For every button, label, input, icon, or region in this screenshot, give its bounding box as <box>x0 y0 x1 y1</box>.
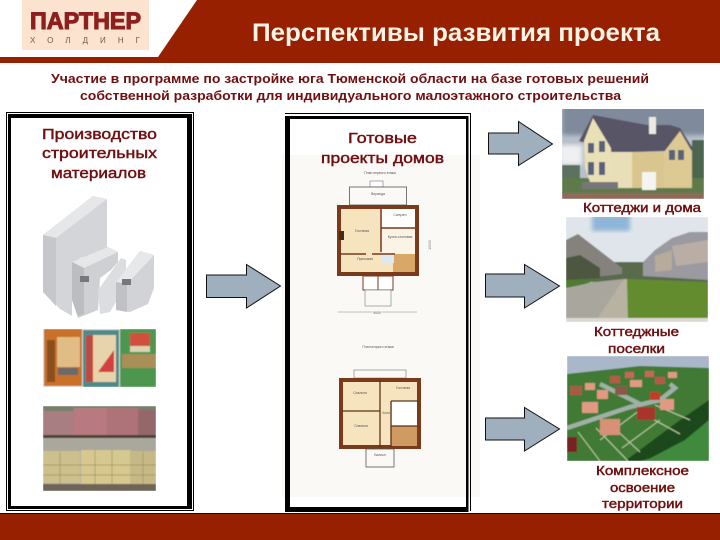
arrow: to cottage settlements <box>486 264 560 308</box>
arrow: to integrated development <box>486 408 560 451</box>
caption: integrated development: освоение <box>610 480 675 495</box>
logo <box>22 0 149 50</box>
subtitle: собственной разработки для индивидуального малоэтажного строительства <box>80 88 622 103</box>
caption: cottages and houses: Коттеджи и дома <box>583 200 702 215</box>
arrow: materials to plans <box>206 264 280 308</box>
caption: integrated development: Комплексное <box>596 463 689 478</box>
floor plan: first floor: Гостиная <box>355 229 369 233</box>
floor plan: first floor: План первого этажа <box>364 171 396 175</box>
subtitle <box>51 71 649 103</box>
caption: integrated development: территории <box>602 496 683 511</box>
caption: integrated development <box>596 463 689 511</box>
caption: cottage settlements: Коттеджные <box>594 324 679 339</box>
floor plan: second floor: Спальня <box>353 391 367 395</box>
floor plan: second floor: Спальня <box>354 424 368 428</box>
floor plan: first floor <box>338 171 432 315</box>
floor plan: first floor: Кухня-столовая <box>388 235 412 239</box>
footer band <box>0 513 720 540</box>
logo: ПАРТНЕР <box>30 8 141 35</box>
logo: ХОЛДИНГ <box>30 36 141 45</box>
floor plan: second floor: Холл <box>382 411 390 415</box>
header band <box>0 0 720 63</box>
photo: cement bags <box>43 329 156 387</box>
floor plan: second floor: План второго этажа <box>362 345 394 349</box>
floor plan: second floor: Гостиная <box>396 386 410 390</box>
caption: cottage settlements: поселки <box>608 341 665 356</box>
heading: house plans <box>321 130 444 167</box>
panel: ready house plans <box>282 114 480 512</box>
floor plan: first floor: 9000 <box>373 311 381 315</box>
heading: building materials: материалов <box>51 165 146 182</box>
subtitle: Участие в программе по застройке юга Тюменской области на базе готовых решений <box>51 71 649 86</box>
photo: house <box>562 109 704 199</box>
photo: brick pallets <box>43 406 156 491</box>
floor plan: first floor: Прихожая <box>357 257 373 261</box>
photo: aerated concrete blocks <box>43 196 154 318</box>
title: Перспективы развития проекта <box>252 19 661 47</box>
floor plan: first floor: Санузел <box>393 213 407 217</box>
caption: cottage settlements <box>594 324 679 356</box>
floor plan: first floor: Веранда <box>371 192 385 196</box>
floor plan: second floor: Балкон <box>374 453 386 457</box>
panel: building materials <box>6 112 194 510</box>
heading: house plans: Готовые <box>348 130 417 147</box>
photo: cottage settlement <box>566 214 708 322</box>
arrow: to cottages and houses <box>488 122 552 166</box>
floor plan: first floor: 10000 <box>428 240 432 250</box>
heading: house plans: проекты домов <box>321 150 444 167</box>
heading: building materials: Производство <box>42 126 157 143</box>
heading: building materials <box>42 126 158 182</box>
floor plan: second floor <box>341 345 419 467</box>
heading: building materials: строительных <box>42 145 158 162</box>
photo: integrated development render <box>567 356 709 461</box>
